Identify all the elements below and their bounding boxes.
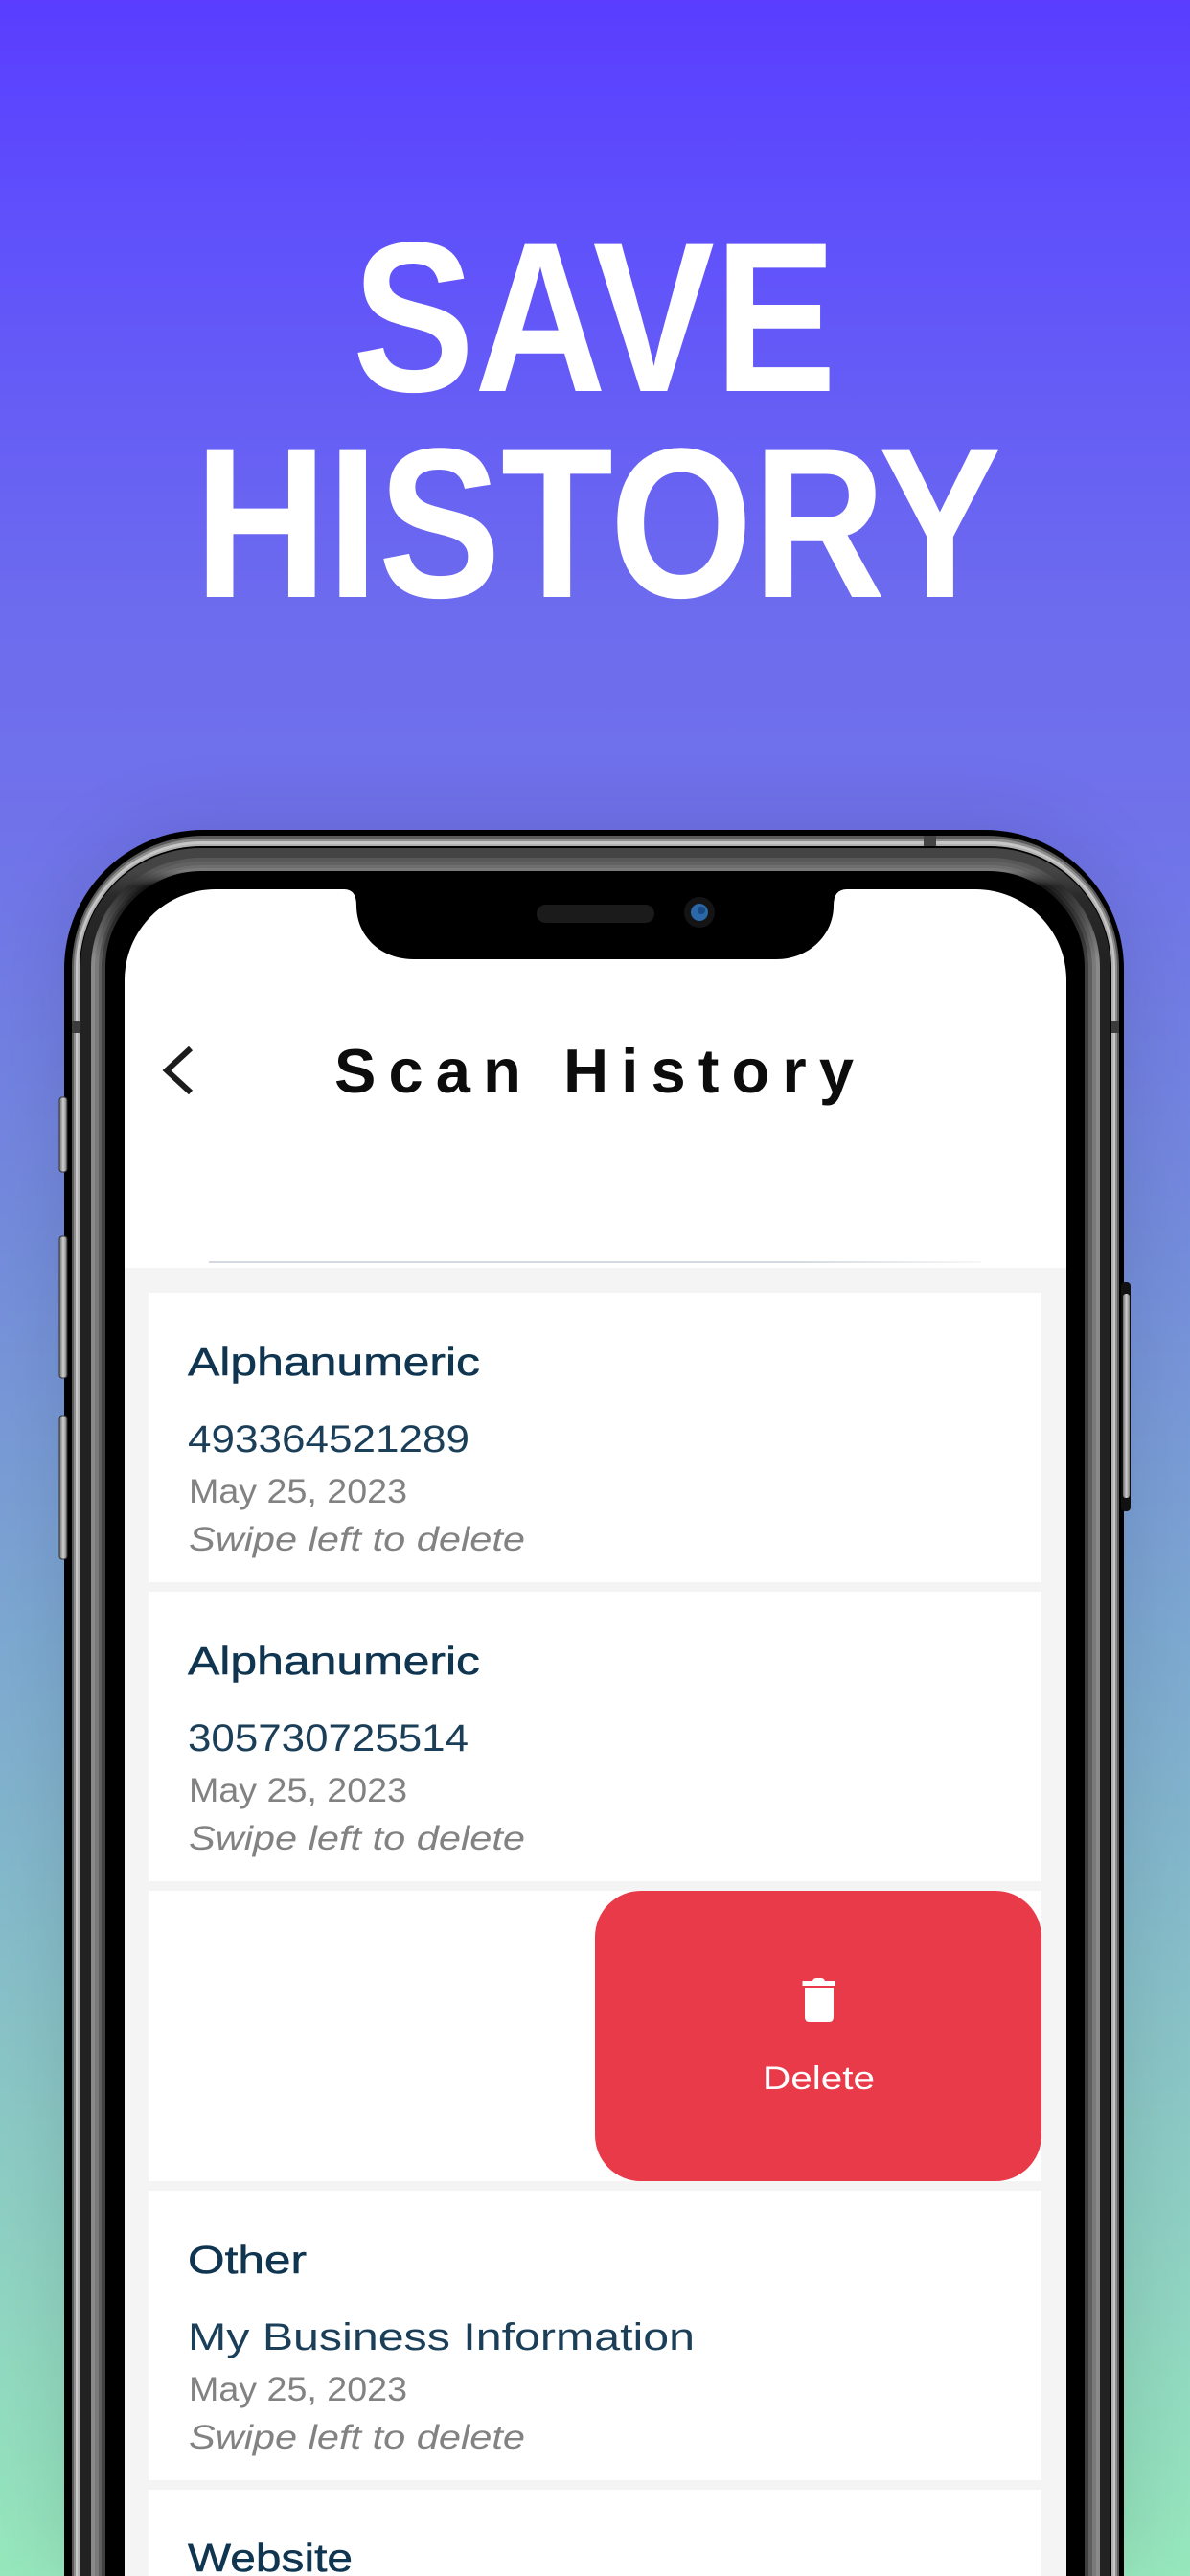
title: HISTORY (195, 404, 1001, 643)
screen heading: Scan History (334, 1036, 854, 1106)
card: alphanumeric 2: Alphanumeric (188, 1639, 480, 1683)
camera (684, 897, 715, 928)
card: alphanumeric 2: 305730725514 (188, 1717, 469, 1760)
card: other: May 25, 2023 (189, 2371, 407, 2408)
delete button (595, 1891, 1041, 2181)
speaker (537, 905, 654, 923)
card: alphanumeric 1: Alphanumeric (188, 1340, 480, 1384)
phone drop shadow (64, 830, 1124, 2576)
card: other (149, 2191, 1041, 2480)
card: alphanumeric 2 (149, 1592, 1041, 1881)
screen (125, 889, 1066, 2576)
card: alphanumeric 2: May 25, 2023 (189, 1772, 407, 1809)
header divider (209, 1261, 981, 1263)
card: other: Other (188, 2238, 307, 2282)
phone (59, 830, 1131, 2576)
icon: trash can (803, 1978, 835, 2022)
title (195, 198, 1001, 643)
card: alphanumeric 1: Swipe left to delete (189, 1521, 525, 1558)
list background (125, 1268, 1066, 2576)
card: swiped row with delete action (149, 1891, 1041, 2181)
card: alphanumeric 2: Swipe left to delete (189, 1820, 525, 1857)
phone frame (64, 830, 1124, 2576)
title: SAVE (353, 198, 836, 437)
card: alphanumeric 1: 493364521289 (188, 1418, 469, 1460)
card: alphanumeric 1 (149, 1293, 1041, 1582)
delete label: Delete (763, 2060, 875, 2097)
notch (344, 889, 847, 959)
card: alphanumeric 1: May 25, 2023 (189, 1473, 407, 1510)
card: other: Swipe left to delete (189, 2419, 525, 2456)
back chevron (167, 1048, 191, 1092)
card: website (149, 2490, 1041, 2576)
side buttons (59, 1097, 1131, 1559)
card: other: My Business Information (188, 2316, 695, 2358)
